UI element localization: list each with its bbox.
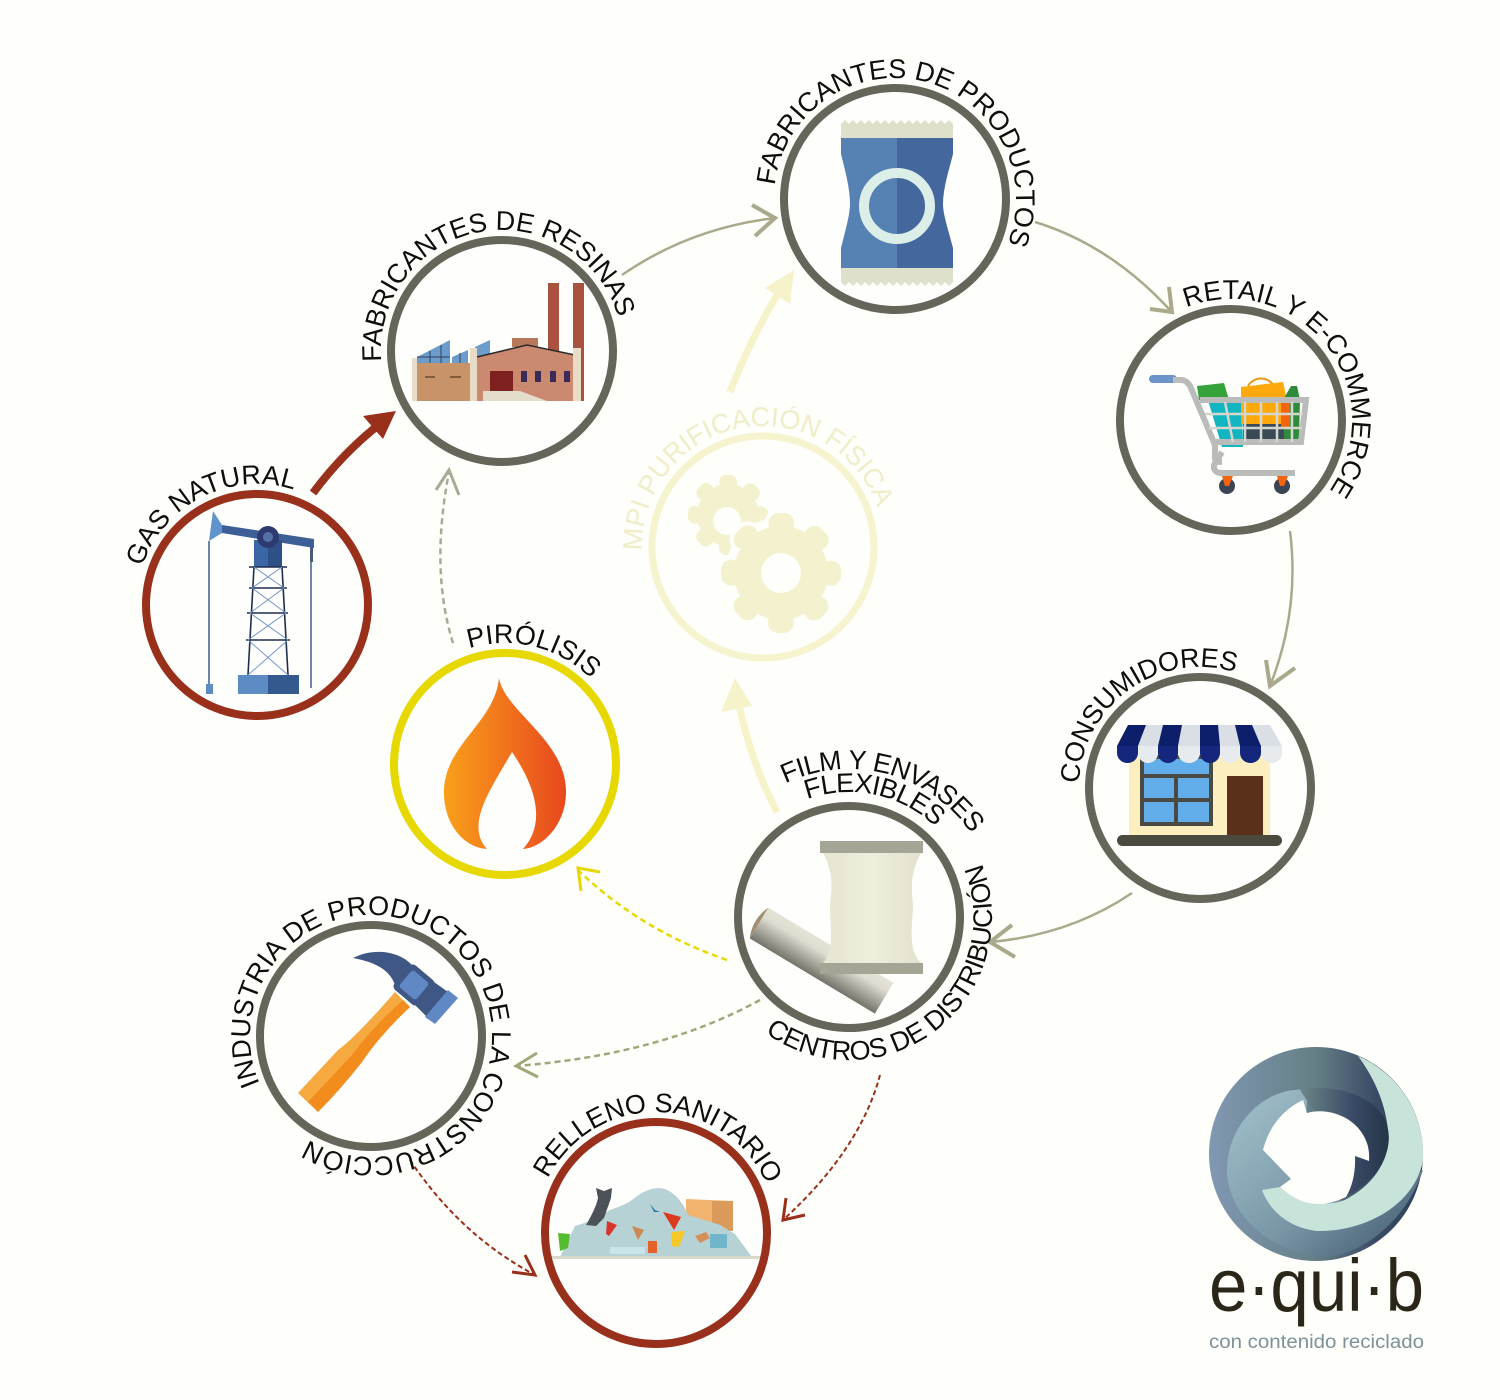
panel: relleno sanitario	[532, 1094, 780, 1348]
logo: e-qui-b	[1209, 1047, 1424, 1353]
arrow: pirolisis to resinas dashed	[436, 470, 459, 643]
arrow: industria to relleno dashed	[410, 1160, 535, 1275]
arrow: resinas to productos	[622, 205, 775, 275]
arrow: film to industria dashed	[516, 1000, 760, 1077]
label: gas natural: GAS NATURAL	[128, 465, 294, 563]
icon: film roll and pouch	[746, 841, 923, 1014]
icon: store	[1117, 725, 1282, 846]
icon: snack bag	[841, 120, 953, 286]
logo mark	[1209, 1047, 1423, 1261]
label: pirolisis: PIRÓLISIS	[467, 622, 600, 676]
label: industria de productos de la construccion: INDUSTRIA DE PRODUCTOS DE LA CONSTRUCCIÓN	[231, 896, 511, 1176]
arrow: film to purificacion fisica	[721, 678, 777, 812]
icon: landfill	[552, 1188, 760, 1259]
icon: shopping cart	[1153, 378, 1306, 494]
icon: flame	[444, 678, 566, 849]
icon: hammer	[298, 952, 458, 1112]
label: film y envases: FILM Y ENVASES	[780, 750, 984, 830]
panel: mpi purificacion fisica	[623, 406, 892, 662]
panel: industria de productos de la construccion	[231, 896, 511, 1176]
panel: film y envases flexibles	[734, 750, 992, 1060]
arrow: gas natural to fabricantes de resinas	[313, 411, 396, 493]
label: retail y e-commerce: RETAIL Y E-COMMERCE	[1182, 280, 1371, 499]
arrow: consumidores to film	[990, 893, 1132, 957]
label: fabricantes de productos: FABRICANTES DE PRODUCTOS	[756, 59, 1035, 246]
arrow: purificacion fisica to productos	[730, 270, 794, 392]
arrow: film to relleno dashed	[783, 1075, 880, 1220]
panel: fabricantes de resinas	[362, 211, 634, 466]
panel: consumidores	[1061, 648, 1315, 903]
arrow: retail to consumidores	[1266, 531, 1295, 686]
label: centros de distribucion: CENTROS DE DISTRIBUCIÓN	[769, 865, 992, 1060]
icon: gears	[695, 482, 837, 629]
logo tagline: con contenido reciclado	[1209, 1332, 1424, 1353]
panel: retail y e-commerce	[1116, 280, 1371, 535]
arrow: productos to retail	[1035, 222, 1172, 312]
panel: pirolisis	[390, 622, 620, 879]
panel: fabricantes de productos	[756, 59, 1035, 314]
arrow: film to pirolisis dashed	[578, 868, 727, 960]
icon: oil pump	[206, 511, 314, 694]
logo wordmark: e·qui·b	[1209, 1244, 1424, 1327]
label: relleno sanitario: RELLENO SANITARIO	[532, 1094, 780, 1180]
label: flexibles: FLEXIBLES	[804, 773, 944, 824]
panel: gas natural	[128, 465, 372, 720]
label: fabricantes de resinas: FABRICANTES DE RESINAS	[362, 211, 634, 360]
label: mpi purificacion fisica: MPI PURIFICACIÓN FÍSICA	[623, 406, 892, 548]
icon: factory	[412, 283, 584, 401]
label: consumidores: CONSUMIDORES	[1061, 648, 1237, 782]
